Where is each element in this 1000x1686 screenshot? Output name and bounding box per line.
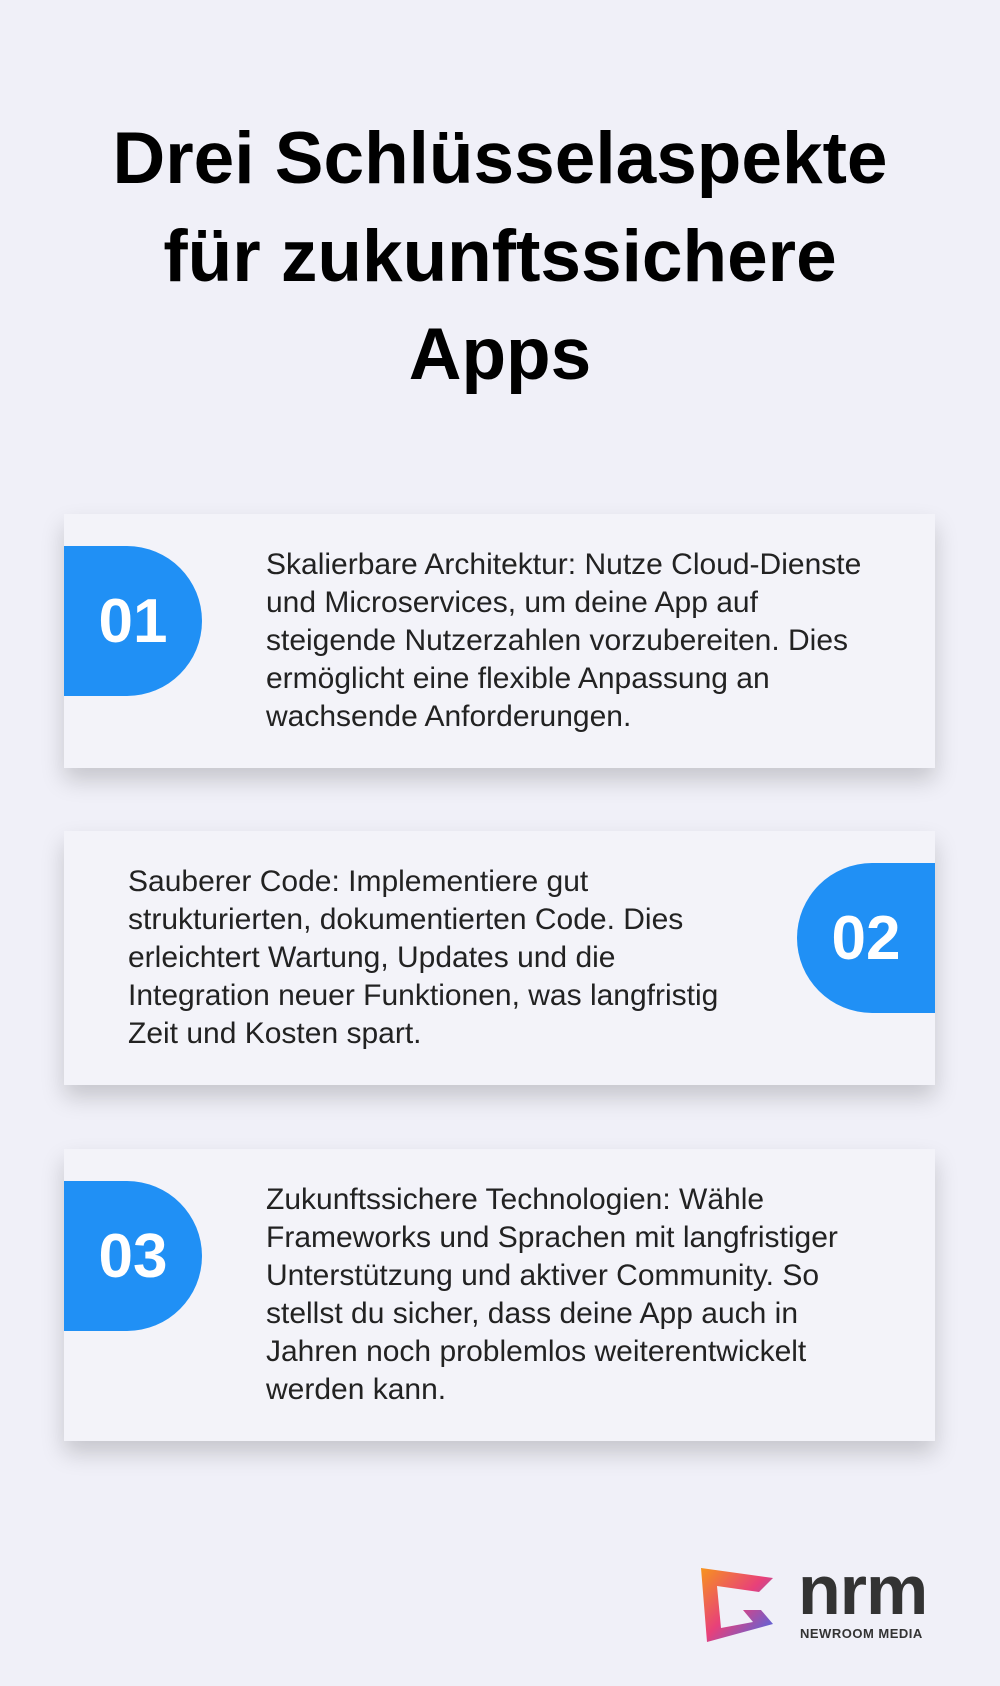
text 2: erleichtert Wartung, Updates und die: [128, 941, 616, 974]
badge 03: [64, 1181, 202, 1331]
text 3: [266, 1183, 838, 1406]
text 3: Frameworks und Sprachen mit langfristiger: [266, 1221, 838, 1254]
panel: card 2: [64, 831, 935, 1085]
text 2: strukturierten, dokumentierten Code. Dies: [128, 903, 683, 936]
badge 01: 01: [99, 586, 167, 656]
text 3: Zukunftssichere Technologien: Wähle: [266, 1183, 764, 1216]
text 2: Zeit und Kosten spart.: [128, 1017, 422, 1050]
text 2: Integration neuer Funktionen, was langfristig: [128, 979, 718, 1012]
logo text: nrm: [798, 1551, 927, 1629]
badge 01: [64, 546, 202, 696]
text 1: Skalierbare Architektur: Nutze Cloud-Dienste: [266, 548, 861, 581]
title: für zukunftssichere: [163, 216, 837, 297]
panel: card 1: [64, 514, 935, 768]
text 1: [266, 548, 861, 733]
text 3: stellst du sicher, dass deine App auch in: [266, 1297, 798, 1330]
badge 03: 03: [99, 1222, 167, 1290]
badge 02: 02: [832, 904, 900, 972]
logo: [701, 1551, 927, 1642]
title: [112, 118, 888, 395]
text 1: wachsende Anforderungen.: [266, 700, 631, 733]
panel: card 3: [64, 1149, 935, 1441]
text 1: steigende Nutzerzahlen vorzubereiten. Dies: [266, 624, 848, 657]
text 3: Unterstützung und aktiver Community. So: [266, 1259, 819, 1292]
badge 02: [797, 863, 935, 1013]
icon: logo mark: [701, 1568, 773, 1642]
text 3: Jahren noch problemlos weiterentwickelt: [266, 1335, 806, 1368]
title: Apps: [409, 314, 591, 395]
title: Drei Schlüsselaspekte: [112, 118, 888, 199]
logo: NEWROOM MEDIA: [800, 1626, 923, 1641]
text 2: [128, 865, 718, 1050]
text 1: und Microservices, um deine App auf: [266, 586, 758, 619]
text 2: Sauberer Code: Implementiere gut: [128, 865, 588, 898]
text 1: ermöglicht eine flexible Anpassung an: [266, 662, 770, 695]
text 3: werden kann.: [266, 1373, 446, 1406]
